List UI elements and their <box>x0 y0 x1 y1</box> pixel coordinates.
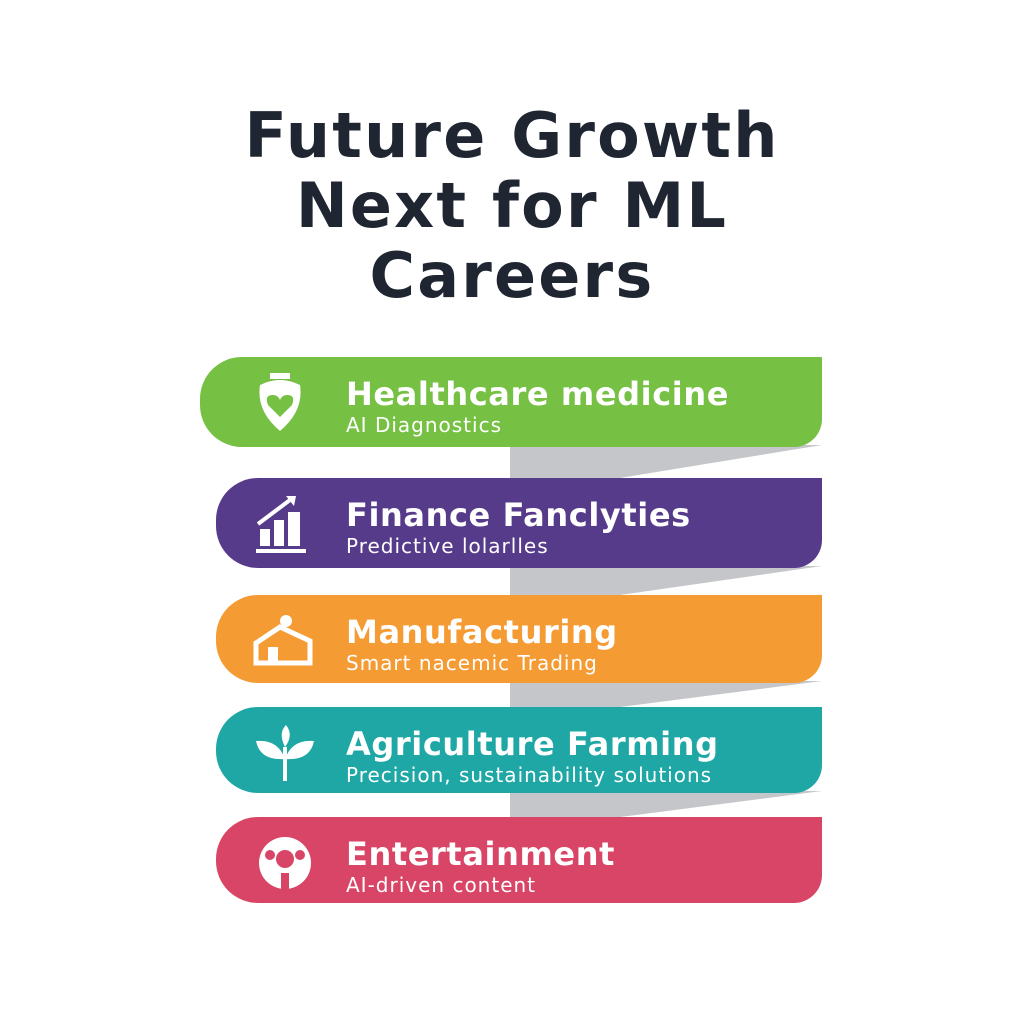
panel: entertainment <box>216 817 822 903</box>
panel: agriculture: Agriculture Farming <box>346 725 719 763</box>
icon: entertainment <box>259 837 311 889</box>
title: Future Growth <box>244 99 780 172</box>
panel: agriculture: Precision, sustainability solutions <box>346 763 712 787</box>
panel: manufacturing <box>216 595 822 683</box>
panel: entertainment: Entertainment <box>346 835 615 873</box>
panel: manufacturing: Manufacturing <box>346 613 618 651</box>
panel: finance: Finance Fanclyties <box>346 496 691 534</box>
panel: healthcare: AI Diagnostics <box>346 413 502 437</box>
icon: chart <box>256 496 306 553</box>
title: Careers <box>370 239 654 312</box>
title: Next for ML <box>296 169 728 242</box>
panel: healthcare <box>200 357 822 447</box>
icon: factory <box>254 615 312 666</box>
panel: finance <box>216 478 822 568</box>
panel: entertainment: AI-driven content <box>346 873 536 897</box>
panel: healthcare: Healthcare medicine <box>346 375 729 413</box>
panel: agriculture <box>216 707 822 793</box>
icon: plant <box>256 725 314 781</box>
panel: finance: Predictive lolarlles <box>346 534 549 558</box>
panel: manufacturing: Smart nacemic Trading <box>346 651 598 675</box>
icon: heart shield <box>259 373 301 431</box>
title <box>244 99 780 312</box>
